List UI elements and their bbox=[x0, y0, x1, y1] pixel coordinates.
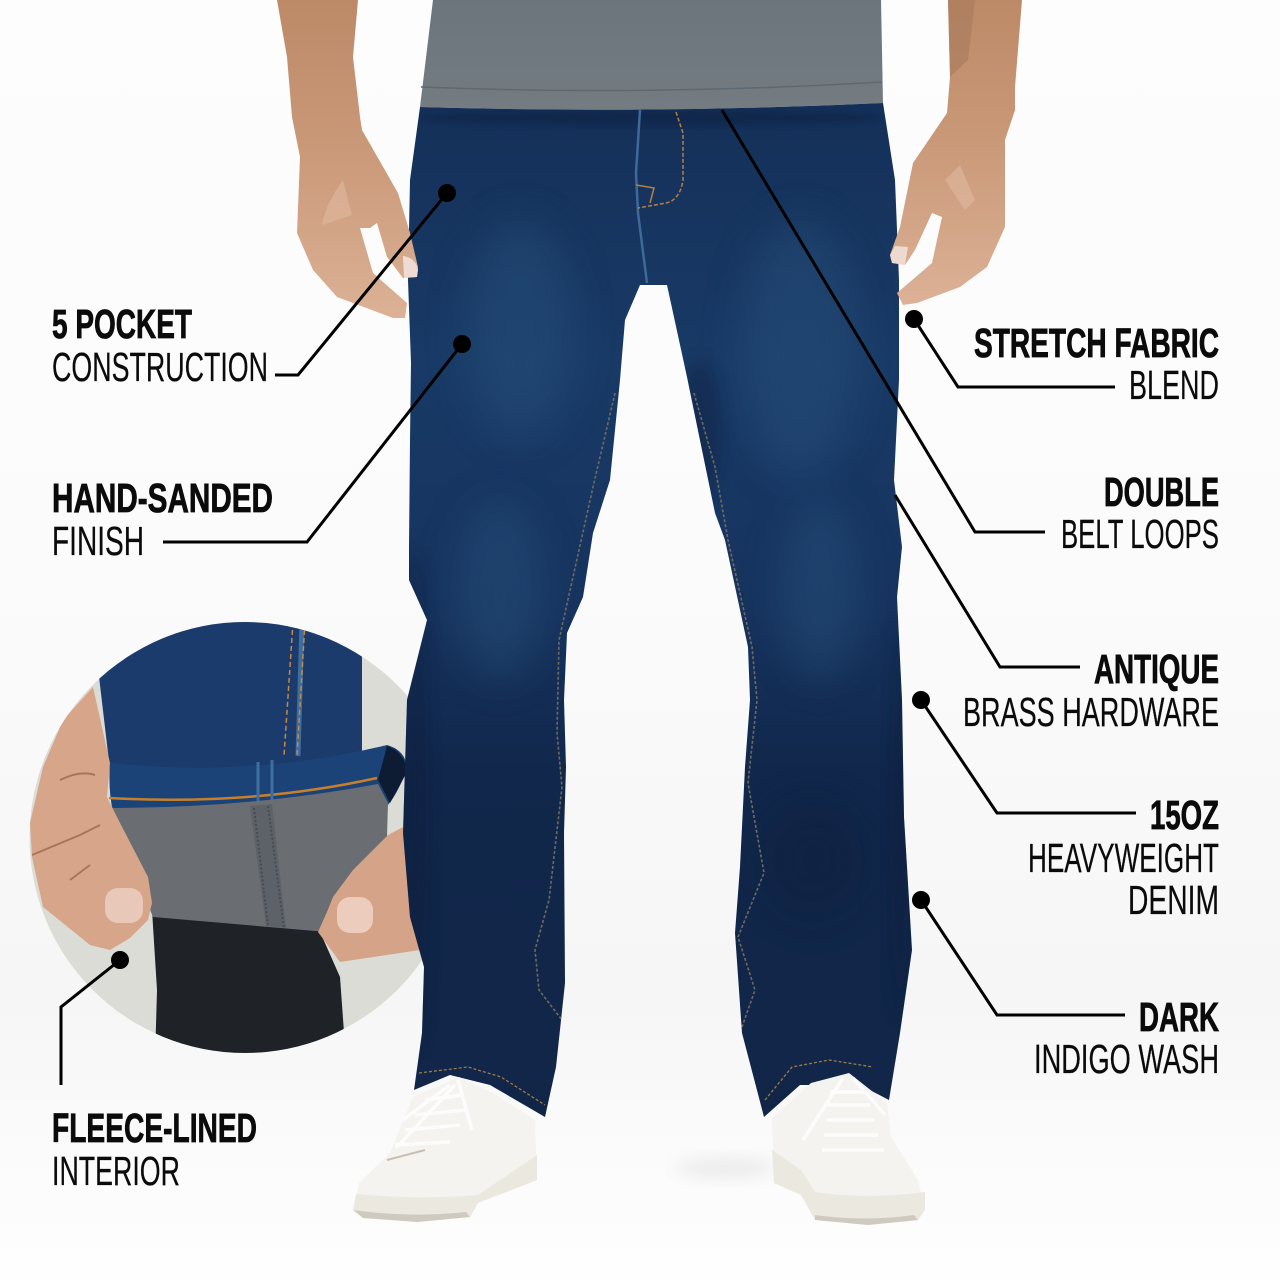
inset: side seam stitching bbox=[284, 622, 305, 756]
callout: stretch fabric bbox=[905, 310, 1219, 408]
callout: antique brass: ANTIQUE bbox=[1094, 646, 1219, 692]
callout: stretch fabric: BLEND bbox=[1129, 362, 1219, 408]
callout: 15oz denim: DENIM bbox=[1128, 877, 1219, 923]
callout: 15oz denim bbox=[912, 691, 1219, 923]
callout: hand-sanded: FINISH bbox=[52, 518, 144, 564]
inset: right hand bbox=[318, 827, 420, 962]
callout: double belt loops: DOUBLE bbox=[1104, 469, 1219, 515]
callout: fleece-lined bbox=[52, 951, 257, 1194]
jeans: hems bbox=[419, 1060, 873, 1105]
callout: antique brass bbox=[895, 495, 1219, 735]
inset: fleece lining bbox=[108, 784, 388, 932]
callout: dark indigo: DARK bbox=[1139, 994, 1219, 1040]
inset: sock bbox=[152, 910, 346, 1060]
callout: 5 pocket bbox=[52, 184, 456, 390]
shoe laces: left bbox=[395, 1080, 472, 1148]
inset: left hand bbox=[30, 687, 152, 950]
callout: dark indigo bbox=[912, 891, 1219, 1082]
callout: fleece-lined: FLEECE-LINED bbox=[52, 1105, 257, 1151]
arm: right bbox=[890, 0, 1022, 305]
jeans: inseam stitching bbox=[535, 393, 764, 1027]
floor shadow bbox=[675, 1158, 775, 1178]
inset: rolled cuff bbox=[109, 745, 407, 812]
jeans: sanded fade bbox=[455, 220, 860, 680]
shoe: right bbox=[772, 1073, 925, 1225]
jeans: shaded folds bbox=[401, 110, 910, 1050]
arm: left bbox=[277, 0, 418, 318]
shoe: left bbox=[353, 1077, 537, 1222]
inset: denim leg bbox=[99, 622, 362, 770]
shoe laces: right bbox=[803, 1078, 885, 1150]
callout: fleece-lined: INTERIOR bbox=[52, 1148, 180, 1194]
callout: hand-sanded: HAND-SANDED bbox=[52, 475, 273, 521]
callout: 5 pocket: 5 POCKET bbox=[52, 301, 192, 347]
callout: 5 pocket: CONSTRUCTION bbox=[52, 344, 268, 390]
jeans bbox=[401, 103, 912, 1117]
inset circle: fleece lining detail bbox=[30, 622, 422, 1053]
jeans: fly stitching bbox=[636, 110, 683, 283]
callout: hand-sanded bbox=[52, 335, 471, 564]
callout: double belt loops bbox=[722, 110, 1219, 557]
shirt bbox=[420, 0, 883, 110]
callout: 15oz denim: 15OZ bbox=[1150, 792, 1219, 838]
